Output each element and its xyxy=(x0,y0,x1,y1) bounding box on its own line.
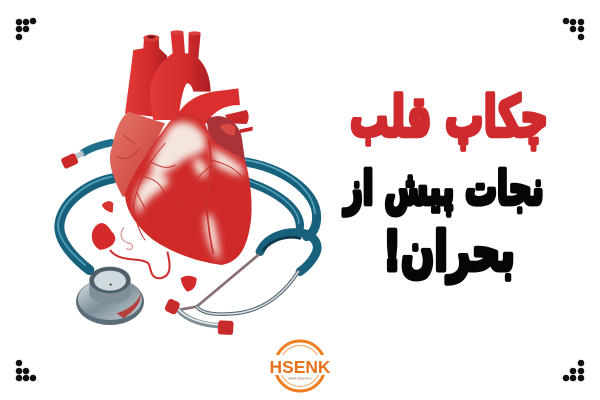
heart left atrium xyxy=(110,112,165,197)
loose red drops and cord xyxy=(92,201,197,292)
corner ornament: bottom right xyxy=(563,360,584,381)
stethoscope ear tip: upper xyxy=(60,153,79,169)
atrium veins xyxy=(117,135,140,159)
corner ornament: bottom left xyxy=(16,360,36,381)
logo: HSENK: HSENK xyxy=(270,357,331,377)
heart right atrium xyxy=(207,116,245,160)
logo: HSENK xyxy=(268,341,332,391)
coronary vessels xyxy=(133,140,242,253)
logo: HSENK: www.hsenk.ir xyxy=(288,376,312,380)
corner ornament: top right xyxy=(563,18,584,40)
heart ventricle xyxy=(125,114,252,265)
heading: red line: چکاپ قلب xyxy=(350,85,548,150)
heading: black line three: بحران! xyxy=(383,221,515,284)
stethoscope ear tips: lower xyxy=(164,298,234,335)
heart great vessels xyxy=(125,30,253,133)
corner ornament: top left xyxy=(16,18,36,40)
heading: black line two: نجات پیش از xyxy=(343,162,544,216)
stethoscope tubes xyxy=(58,143,317,272)
stethoscope binaurals xyxy=(178,255,298,326)
illustration: heart and stethoscope xyxy=(58,30,317,335)
stethoscope chest piece xyxy=(76,267,144,325)
